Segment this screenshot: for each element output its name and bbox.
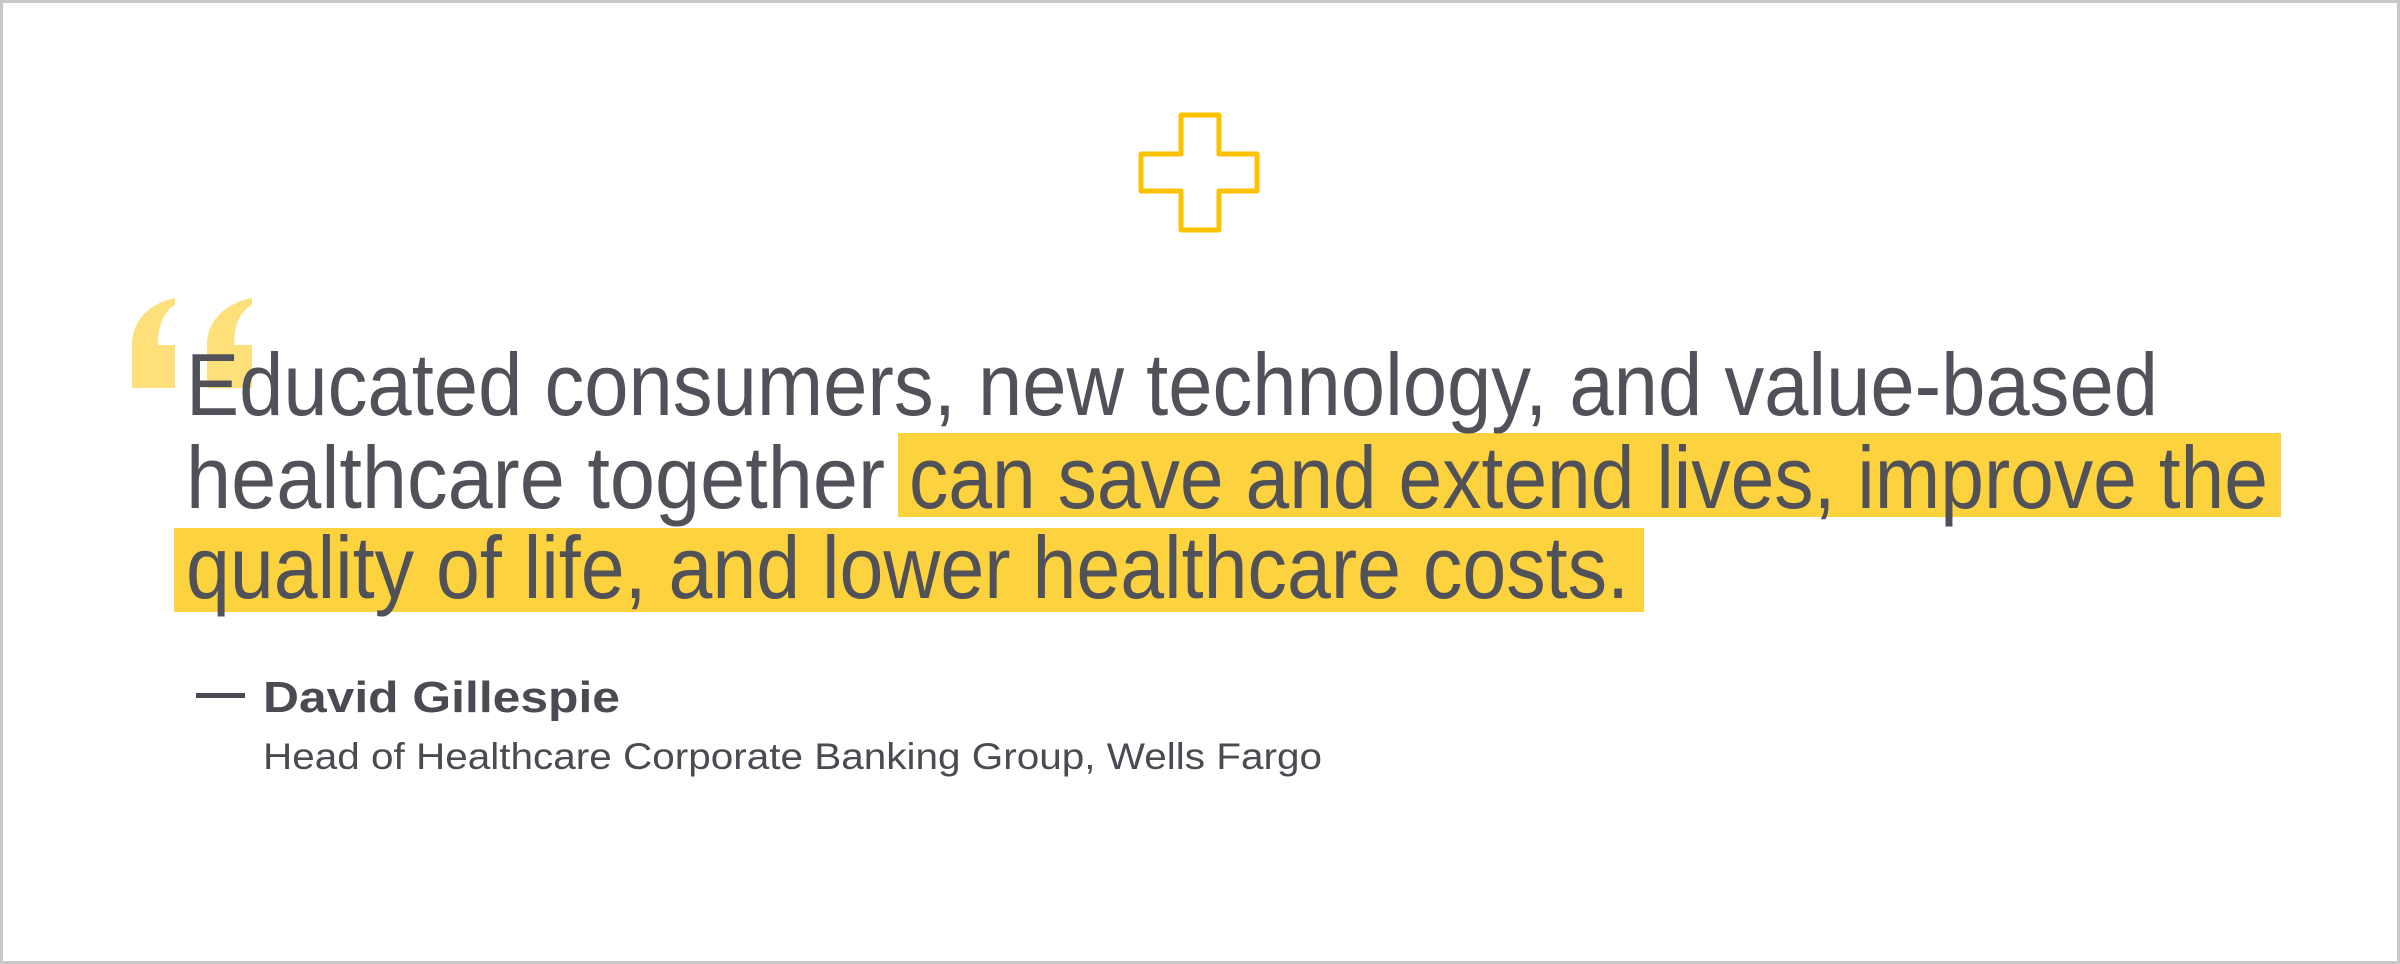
attribution: Head of Healthcare Corporate Banking Group, Wells Fargo <box>263 736 1322 777</box>
quote text: can save and extend lives, improve the <box>909 428 2268 527</box>
icon: quotation marks <box>132 298 252 388</box>
quote text: Educated consumers, new technology, and value-based <box>186 335 2158 434</box>
highlight line 3 <box>174 528 1644 612</box>
quote text: healthcare together <box>186 428 885 527</box>
icon: medical cross <box>1141 115 1257 230</box>
attribution: David Gillespie <box>263 673 620 722</box>
highlight line 2 <box>898 433 2281 517</box>
quote text <box>186 335 2268 617</box>
quote text: quality of life, and lower healthcare costs. <box>186 518 1629 617</box>
attribution <box>196 673 1322 777</box>
